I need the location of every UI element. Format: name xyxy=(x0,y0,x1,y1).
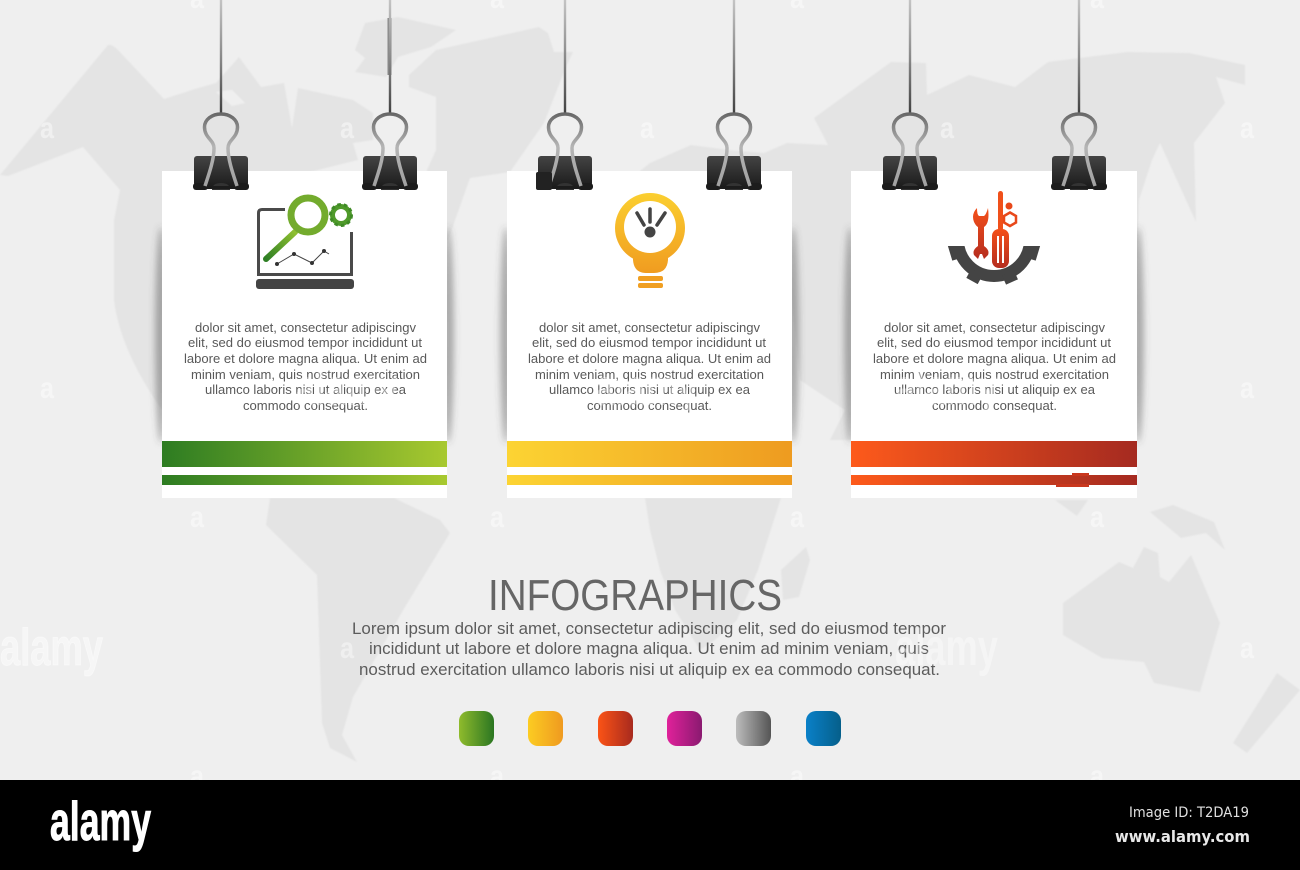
footer url: www.alamy.com xyxy=(1115,827,1250,846)
red stripes xyxy=(851,441,1137,487)
watermark over text: alamy xyxy=(595,359,698,417)
card text: commodo consequat. xyxy=(932,398,1057,413)
panel: red tools card xyxy=(844,171,1144,498)
icon: laptop with magnifier and gear xyxy=(256,198,354,289)
icon: gear with wrench and screwdriver xyxy=(950,191,1038,282)
color swatches xyxy=(459,711,841,746)
watermark pattern: alamy xyxy=(0,619,103,677)
description text: Lorem ipsum dolor sit amet, consectetur adipiscing elit, sed do eiusmod tempor xyxy=(352,619,946,638)
card text: labore et dolore magna aliqua. Ut enim ad xyxy=(528,351,771,366)
watermark pattern: a xyxy=(490,501,504,534)
watermark pattern: a xyxy=(640,112,654,145)
watermark over text xyxy=(295,359,998,677)
card text: dolor sit amet, consectetur adipiscingv xyxy=(195,320,416,335)
description text: nostrud exercitation ullamco laboris nisi ut aliquip ex ea commodo consequat. xyxy=(359,660,940,679)
card text: ullamco laboris nisi ut aliquip ex ea xyxy=(549,382,751,397)
card text xyxy=(528,320,771,413)
watermark pattern: a xyxy=(40,372,54,405)
card text xyxy=(873,320,1116,413)
card text: dolor sit amet, consectetur adipiscingv xyxy=(884,320,1105,335)
watermark over text: a xyxy=(340,632,354,665)
watermark pattern: a xyxy=(1240,372,1254,405)
watermark pattern: a xyxy=(1240,112,1254,145)
title: INFOGRAPHICS xyxy=(488,571,782,620)
card text: minim veniam, quis nostrud exercitation xyxy=(535,367,764,382)
image id: Image ID: T2DA19 xyxy=(1129,805,1249,821)
watermark pattern: a xyxy=(790,760,804,793)
watermark pattern: a xyxy=(790,501,804,534)
card text: ullamco laboris nisi ut aliquip ex ea xyxy=(205,382,407,397)
watermark pattern: a xyxy=(1240,632,1254,665)
card text: dolor sit amet, consectetur adipiscingv xyxy=(539,320,760,335)
green stripes xyxy=(162,441,447,485)
watermark pattern: a xyxy=(940,112,954,145)
card text: elit, sed do eiusmod tempor incididunt ut xyxy=(877,335,1111,350)
watermark pattern: a xyxy=(190,501,204,534)
icon: light bulb xyxy=(615,193,685,288)
footer bar xyxy=(0,780,1300,870)
watermark pattern: a xyxy=(40,112,54,145)
card text: labore et dolore magna aliqua. Ut enim ad xyxy=(184,351,427,366)
card text: commodo consequat. xyxy=(243,398,368,413)
card text: ullamco laboris nisi ut aliquip ex ea xyxy=(894,382,1096,397)
panel: yellow idea card xyxy=(500,171,799,498)
card text: minim veniam, quis nostrud exercitation xyxy=(880,367,1109,382)
watermark over text: alamy xyxy=(895,359,998,417)
yellow stripes xyxy=(507,441,792,485)
watermark pattern: a xyxy=(190,760,204,793)
card text: minim veniam, quis nostrud exercitation xyxy=(191,367,420,382)
panel: green analytics card xyxy=(155,171,454,498)
description text: incididunt ut labore et dolore magna aliqua. Ut enim ad minim veniam, quis xyxy=(369,639,929,658)
card text: labore et dolore magna aliqua. Ut enim ad xyxy=(873,351,1116,366)
binder clips and hanging strings xyxy=(193,0,1107,190)
card text: commodo consequat. xyxy=(587,398,712,413)
watermark pattern: a xyxy=(1090,501,1104,534)
watermark pattern: a xyxy=(490,760,504,793)
watermark pattern: a xyxy=(340,112,354,145)
watermark pattern: a xyxy=(1090,760,1104,793)
description text xyxy=(352,619,946,679)
watermark over text: alamy xyxy=(895,619,998,677)
watermark over text: alamy xyxy=(295,359,398,417)
card text: elit, sed do eiusmod tempor incididunt ut xyxy=(188,335,422,350)
card text xyxy=(184,320,427,413)
card text: elit, sed do eiusmod tempor incididunt ut xyxy=(532,335,766,350)
footer logo: alamy xyxy=(50,790,151,852)
